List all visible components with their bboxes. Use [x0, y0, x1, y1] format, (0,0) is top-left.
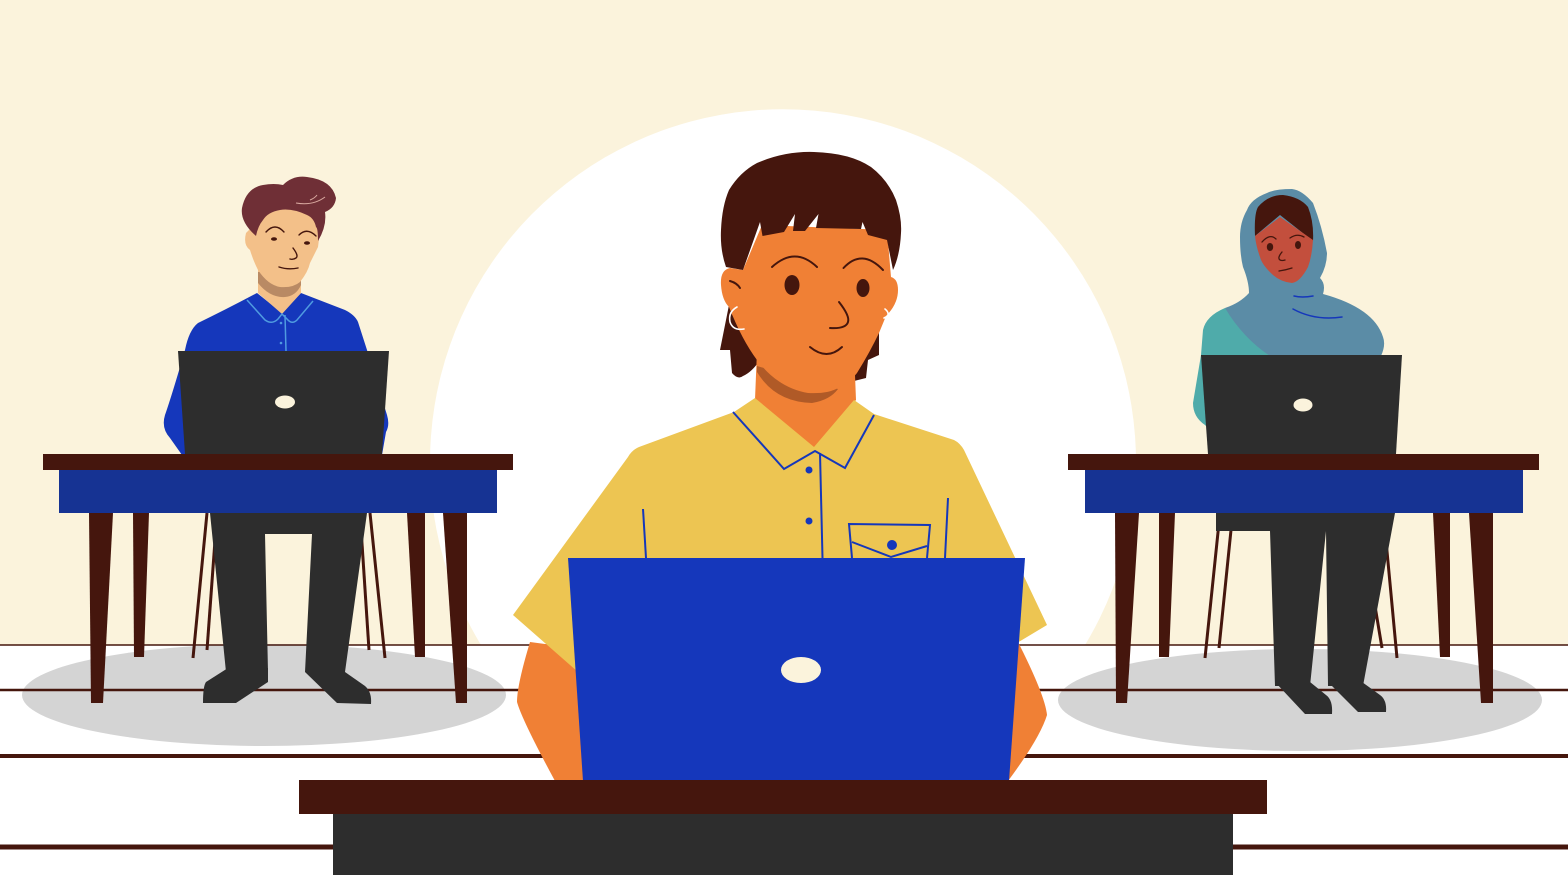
left person neck: [258, 265, 301, 314]
left person torso: [164, 293, 388, 455]
left desk back legs: [133, 513, 425, 657]
central person head: [721, 225, 898, 393]
central person shirt collar and pocket: [643, 412, 948, 558]
left person: [164, 177, 388, 455]
right person face features: [1262, 235, 1304, 271]
central person arms: [517, 640, 1047, 781]
left person trousers and shoes: [203, 513, 371, 704]
background wall: [0, 0, 1568, 645]
central desk: [299, 780, 1267, 875]
right person face: [1255, 217, 1313, 283]
left person hair highlight: [296, 195, 325, 204]
right person teal dress: [1193, 308, 1280, 430]
right workstation: [1068, 189, 1539, 714]
right person headscarf: [1225, 189, 1384, 356]
central person earrings: [730, 307, 888, 329]
left desk: [43, 454, 513, 703]
left person shirt collar: [247, 300, 313, 351]
right floor shadow: [1058, 649, 1542, 751]
right chair legs: [1205, 513, 1397, 658]
left person face features: [266, 227, 316, 269]
central person face features: [730, 256, 883, 354]
central person shirt: [513, 398, 1047, 672]
central person hair: [721, 152, 901, 270]
right desk: [1068, 454, 1539, 703]
left workstation: [43, 177, 513, 704]
right person scarf folds: [1293, 296, 1342, 318]
spotlight circle: [430, 109, 1136, 645]
right person: [1193, 189, 1384, 430]
right laptop: [1201, 355, 1402, 454]
right person hair: [1255, 195, 1313, 241]
left person neck shadow: [258, 272, 301, 297]
right person trousers and shoes: [1216, 513, 1395, 714]
central person: [513, 152, 1047, 781]
left laptop: [178, 351, 389, 454]
central person neck shadow: [757, 366, 838, 403]
central person neck: [755, 350, 856, 449]
central person back hair: [720, 305, 879, 382]
floor lines: [0, 645, 1568, 847]
left floor shadow: [22, 644, 506, 746]
central laptop: [568, 558, 1025, 781]
right desk back legs: [1159, 513, 1450, 657]
left person hair: [242, 177, 336, 241]
left chair legs: [193, 513, 385, 658]
left person head: [245, 205, 322, 287]
